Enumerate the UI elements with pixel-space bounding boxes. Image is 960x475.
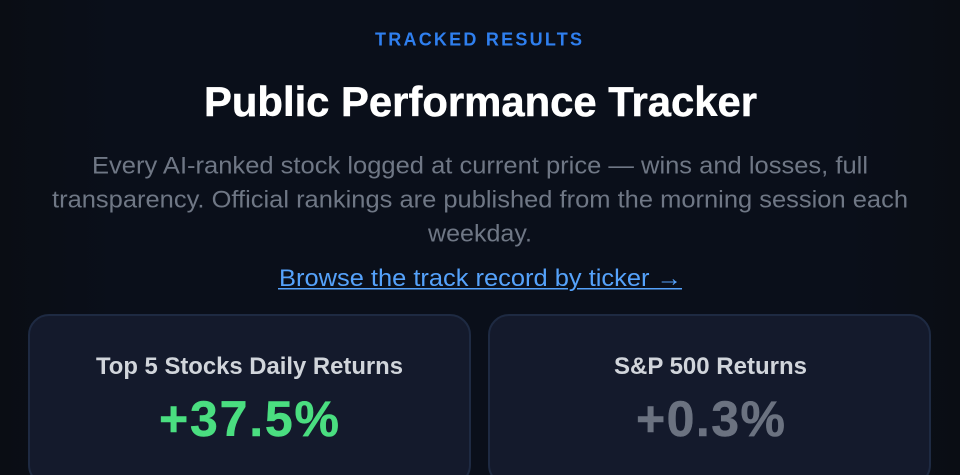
- panel: top 5 stocks daily returns: [29, 315, 470, 475]
- panel: S&amp;P 500 returns: [489, 315, 930, 475]
- card background: [29, 315, 470, 475]
- eyebrow label: TRACKED RESULTS: [375, 30, 582, 50]
- card label: S&P 500 Returns: [614, 353, 807, 380]
- description paragraph: Every AI-ranked stock logged at current price — wins and losses, full: [92, 153, 868, 180]
- card value: +0.3%: [636, 391, 785, 447]
- description paragraph: [52, 153, 908, 248]
- title: Public Performance Tracker: [204, 78, 757, 125]
- card background: [489, 315, 930, 475]
- card value: +37.5%: [159, 391, 339, 447]
- description paragraph: weekday.: [427, 221, 532, 248]
- track record link: Browse the track record by ticker →: [279, 265, 682, 292]
- description paragraph: transparency. Official rankings are published from the morning session each: [52, 187, 908, 214]
- card label: Top 5 Stocks Daily Returns: [96, 353, 403, 380]
